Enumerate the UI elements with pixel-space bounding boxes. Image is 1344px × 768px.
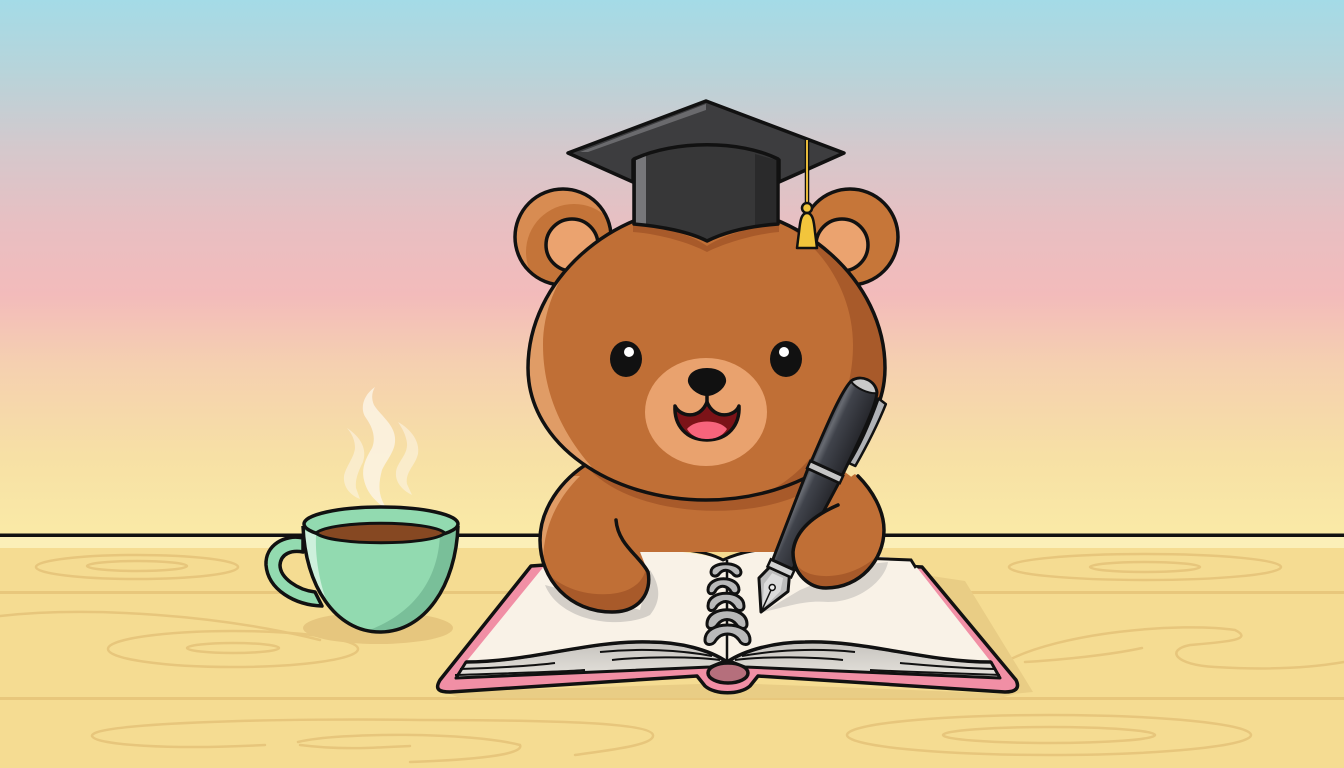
pen nib [746, 565, 794, 619]
graduation cap [568, 101, 844, 248]
cap base [634, 145, 778, 241]
writing pages [466, 548, 991, 662]
shadow of the cap [633, 224, 779, 252]
pen band [807, 461, 843, 483]
pen clip [849, 399, 887, 467]
coffee cup with steam [266, 387, 470, 644]
book shadow [925, 575, 1033, 694]
mortarboard [568, 101, 844, 182]
steam [344, 387, 418, 509]
paw shadows [545, 570, 658, 622]
bear body and arms [538, 465, 852, 614]
left ear [513, 187, 612, 286]
pen collar [767, 559, 794, 577]
cup rim [304, 507, 458, 541]
mouth [675, 394, 739, 440]
cup shadow [303, 612, 453, 644]
cup handle [266, 537, 322, 606]
spiral binding [705, 564, 750, 644]
pen barrel [767, 469, 839, 572]
pink cover [438, 565, 1018, 693]
muzzle [645, 358, 767, 466]
right ear [802, 189, 898, 285]
right eye [770, 341, 802, 377]
right paw holding pen [793, 474, 884, 588]
bear head [526, 220, 887, 502]
tassel [797, 140, 817, 248]
bear ears [513, 187, 900, 286]
sky gradient background [0, 0, 1344, 536]
left eye [610, 341, 642, 377]
wooden table [0, 534, 1344, 768]
open notebook [438, 548, 1033, 698]
page block edges [456, 642, 1000, 678]
cup bowl [303, 526, 458, 632]
head main tone [543, 200, 853, 505]
coffee [316, 523, 445, 543]
pen cap [811, 372, 884, 476]
spine bump [708, 663, 748, 683]
fountain pen [745, 372, 892, 623]
nose [688, 368, 726, 396]
